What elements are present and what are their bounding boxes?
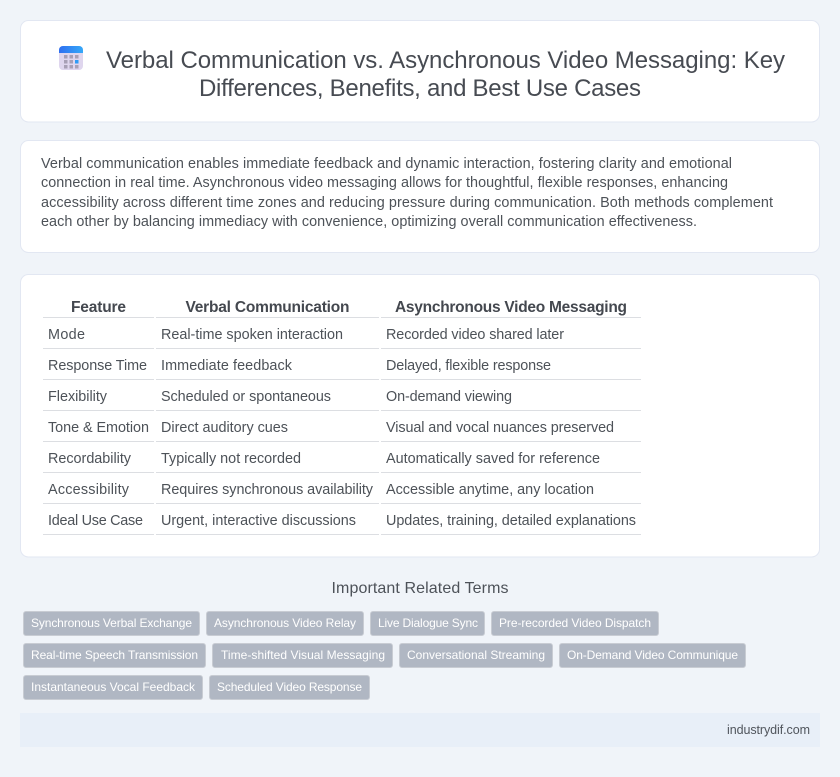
text block: summary: connection in real time. Asynchronous video messaging allows for thoughtful, flexible responses, enhancing bbox=[41, 175, 728, 191]
row: tone and emotion bbox=[48, 420, 614, 436]
tag bbox=[210, 676, 370, 700]
text block: summary: Verbal communication enables immediate feedback and dynamic interaction, fostering clarity and emotional bbox=[41, 156, 732, 172]
heading: Differences, Benefits, and Best Use Cases bbox=[199, 75, 641, 102]
tag: On-Demand Video Communique bbox=[567, 648, 738, 662]
panel: title card bbox=[20, 20, 820, 122]
row: flexibility: Scheduled or spontaneous bbox=[161, 389, 331, 405]
row: accessibility bbox=[48, 482, 594, 498]
row: accessibility: Accessible anytime, any location bbox=[386, 482, 594, 498]
row: tone and emotion: Direct auditory cues bbox=[161, 420, 288, 436]
row: recordability: Automatically saved for reference bbox=[386, 451, 600, 467]
tag bbox=[492, 612, 658, 636]
tag: Synchronous Verbal Exchange bbox=[31, 616, 192, 630]
row: recordability bbox=[48, 451, 600, 467]
row: ideal use case: Ideal Use Case bbox=[48, 513, 143, 529]
row: tone and emotion: Visual and vocal nuances preserved bbox=[386, 420, 614, 436]
row: flexibility bbox=[48, 389, 512, 405]
tag bbox=[24, 612, 200, 636]
row: response time: Response Time bbox=[48, 358, 147, 374]
tag: Conversational Streaming bbox=[407, 648, 545, 662]
row: mode bbox=[48, 327, 564, 343]
heading: Verbal Communication vs. Asynchronous Video Messaging: Key bbox=[106, 47, 785, 74]
footer bar bbox=[20, 713, 820, 747]
row: accessibility: Requires synchronous availability bbox=[161, 482, 374, 498]
tag bbox=[24, 644, 206, 668]
table header bbox=[71, 299, 627, 316]
table header: Asynchronous Video Messaging bbox=[395, 299, 627, 316]
row: response time bbox=[48, 358, 551, 374]
heading: related terms: Important Related Terms bbox=[332, 580, 508, 597]
tag bbox=[24, 676, 202, 700]
row: mode: Mode bbox=[48, 327, 85, 343]
row: flexibility: On-demand viewing bbox=[386, 389, 512, 405]
tag: Time-shifted Visual Messaging bbox=[221, 648, 385, 662]
tag: Asynchronous Video Relay bbox=[214, 616, 356, 630]
row: mode: Recorded video shared later bbox=[386, 327, 564, 343]
row: accessibility: Accessibility bbox=[48, 482, 130, 498]
row: tone and emotion: Tone & Emotion bbox=[48, 420, 149, 436]
table header: Feature bbox=[71, 299, 126, 316]
row: recordability: Recordability bbox=[48, 451, 132, 467]
tag bbox=[206, 612, 364, 636]
row: recordability: Typically not recorded bbox=[161, 451, 301, 467]
panel: comparison table bbox=[20, 274, 820, 557]
heading bbox=[106, 47, 785, 102]
text block: summary: accessibility across different time zones and reducing pressure during communication. Both methods complement bbox=[41, 195, 773, 211]
text block: summary: each other by balancing immediacy with convenience, optimizing overall communication effectiveness. bbox=[41, 214, 697, 230]
tag: Live Dialogue Sync bbox=[378, 616, 478, 630]
tag bbox=[212, 644, 392, 668]
table header: Verbal Communication bbox=[186, 299, 350, 316]
footer source text: industrydif.com bbox=[727, 723, 810, 737]
tag list: related terms bbox=[24, 612, 746, 700]
table rules bbox=[43, 318, 641, 534]
row: response time: Delayed, flexible response bbox=[386, 358, 551, 374]
tag: Instantaneous Vocal Feedback bbox=[31, 680, 196, 694]
tag: Scheduled Video Response bbox=[217, 680, 362, 694]
text block: summary bbox=[41, 156, 773, 230]
tag: Pre-recorded Video Dispatch bbox=[499, 616, 651, 630]
panel: summary paragraph bbox=[20, 140, 820, 252]
row: ideal use case: Urgent, interactive discussions bbox=[161, 513, 356, 529]
row: flexibility: Flexibility bbox=[48, 389, 108, 405]
row: mode: Real-time spoken interaction bbox=[161, 327, 343, 343]
tag bbox=[400, 644, 552, 668]
tag: Real-time Speech Transmission bbox=[31, 648, 198, 662]
tag bbox=[560, 644, 746, 668]
tag bbox=[370, 612, 484, 636]
icon: calendar bbox=[59, 46, 83, 70]
row: response time: Immediate feedback bbox=[161, 358, 293, 374]
row: ideal use case: Updates, training, detailed explanations bbox=[386, 513, 636, 529]
row: ideal use case bbox=[48, 513, 636, 529]
